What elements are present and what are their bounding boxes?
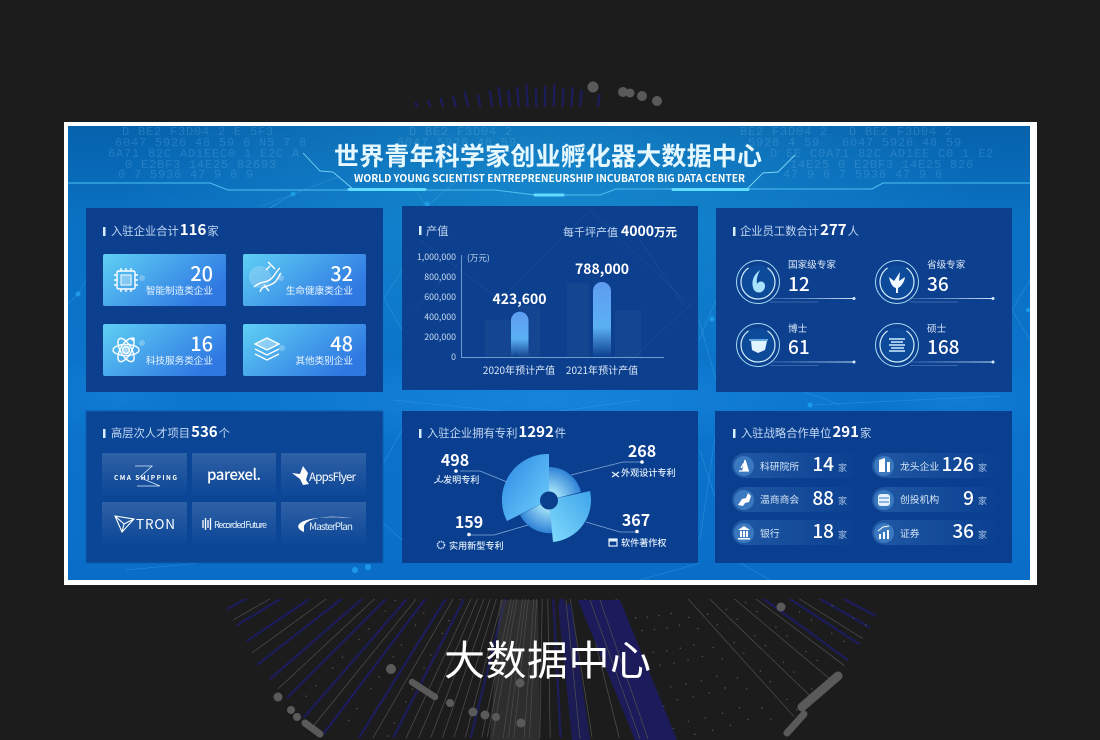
card: technology services: 科技服务类企业 <box>146 353 213 367</box>
card: life health: 32 <box>330 258 353 287</box>
bar chart: output value: 788,000 <box>575 259 629 279</box>
stat: doctorate: 61 <box>788 333 810 360</box>
heading: output value: 产值 <box>426 223 449 239</box>
callout: invention patents: 发明专利 <box>443 472 479 486</box>
card: life health <box>243 254 366 306</box>
stat: national experts: 国家级专家 <box>788 257 836 271</box>
row: research institutes: 科研院所 <box>760 459 799 473</box>
logo: CMA Shipping: CMA SHIPPING <box>114 472 177 482</box>
row: venture investment: 家 <box>978 494 987 507</box>
logo: Recorded Future: Recorded Future <box>214 518 267 531</box>
row: banks: 家 <box>838 528 847 541</box>
row: banks: 18 <box>812 517 834 544</box>
decorative data digits: 5926 4 59 <box>748 136 820 150</box>
heading: talent total: 高层次人才项目536个 <box>111 421 230 442</box>
decorative data digits: 47 9 6 7 5936 47 9 6 <box>783 168 943 182</box>
decorative data digits: D BE2 F3D04 2 E 5F3 <box>122 125 274 139</box>
stat: provincial experts: 36 <box>927 270 949 297</box>
row: Wenzhou chambers of commerce: 88 <box>812 484 834 511</box>
wedge fills <box>578 600 677 740</box>
panel: output value <box>402 206 698 390</box>
logo: AppsFlyer: AppsFlyer <box>309 469 357 485</box>
callout: design patents: 268 <box>628 438 656 462</box>
decorative data digits: 14E25 0 E2BF3 14E25 826 <box>790 158 974 172</box>
decorative data digits: D EE C0A71 82C AD1EE C0 1 E2 <box>770 147 994 161</box>
row: Wenzhou chambers of commerce: 温商商会 <box>760 492 799 506</box>
row: leading enterprises: 龙头企业 <box>900 459 939 473</box>
bar chart: output value <box>417 250 664 377</box>
stat: masters: 168 <box>927 333 960 360</box>
row: securities: 证券 <box>900 526 920 540</box>
card: technology services: 16 <box>190 328 213 357</box>
dashboard board background <box>30 126 1050 580</box>
caption: 大数据中心 <box>444 627 651 687</box>
row: leading enterprises: 126 <box>942 450 974 477</box>
callout: invention patents: 498 <box>441 447 469 471</box>
bar chart: output value: 2020年预计产值 <box>483 362 555 377</box>
row: research institutes: 家 <box>838 461 847 474</box>
row: leading enterprises <box>872 450 1002 478</box>
bar chart: output value: 2021年预计产值 <box>566 362 638 377</box>
heading: employees total: 企业员工数合计277人 <box>740 219 859 240</box>
callout: output per thousand ping: 每千坪产值4000万元 <box>563 221 678 241</box>
blobs <box>274 82 786 728</box>
callout: software copyright <box>609 507 666 549</box>
row: venture investment <box>872 484 1002 512</box>
decorative data digits: 0 7 5936 47 9 6 9 <box>118 168 254 182</box>
panel: high-level talent projects <box>86 411 383 563</box>
logo: Recorded Future <box>192 502 276 547</box>
header: circuit lines <box>68 153 1030 195</box>
stat: provincial experts: 省级专家 <box>927 257 966 271</box>
card: smart manufacturing <box>103 254 226 306</box>
rose pie chart: patents <box>460 454 642 542</box>
bar chart: output value: 400,000 <box>424 310 456 323</box>
background: radial data rays <box>227 82 876 740</box>
decorative data digits: D BE2 F3D04 2 <box>409 125 513 139</box>
stat: masters <box>876 321 994 366</box>
bar chart: output value: 600,000 <box>424 290 456 303</box>
stat: masters: 硕士 <box>927 321 947 335</box>
decorative data digits <box>108 125 994 182</box>
logo: CMA Shipping <box>102 453 187 498</box>
stat: national experts <box>736 257 856 304</box>
callout: design patents <box>612 438 676 479</box>
title: 世界青年科学家创业孵化器大数据中心 <box>334 137 762 173</box>
heading: partners total: 入驻战略合作单位291家 <box>741 421 871 442</box>
row: leading enterprises: 家 <box>978 461 987 474</box>
row: Wenzhou chambers of commerce: 家 <box>838 494 847 507</box>
logo: Tron <box>102 502 187 547</box>
decorative data digits: BE2 F3D04 2 <box>740 125 828 139</box>
row: banks: 银行 <box>760 526 780 540</box>
callout: software copyright: 367 <box>622 507 650 531</box>
logo: Parexel: parexel. <box>207 464 261 485</box>
row: Wenzhou chambers of commerce <box>732 484 862 512</box>
row: research institutes: 14 <box>812 450 834 477</box>
decorative data digits: D BE2 F3D04 2 <box>849 125 953 139</box>
card: other enterprises: 其他类别企业 <box>295 353 353 367</box>
decorative data digits: 6047 5926 48 59 <box>397 136 517 150</box>
bar chart: output value: 800,000 <box>424 270 456 283</box>
bar chart: output value: 200,000 <box>424 330 456 343</box>
decorative data digits: 6047 5926 48 59 <box>842 136 962 150</box>
decorative data digits: 6047 5926 48 59 6 N5 7 8 <box>115 136 307 150</box>
card: smart manufacturing: 智能制造类企业 <box>146 283 213 297</box>
bar chart: output value: 0 <box>451 350 456 363</box>
card: life health: 生命健康类企业 <box>286 283 353 297</box>
row: securities: 家 <box>978 528 987 541</box>
bar chart: output value: 1,000,000 <box>417 250 456 263</box>
logo: Tron: TRON <box>136 513 175 533</box>
stat: national experts: 12 <box>788 270 810 297</box>
subtitle: WORLD YOUNG SCIENTIST ENTREPRENEURSHIP INCUBATOR BIG DATA CENTER <box>354 171 745 186</box>
card: other enterprises: 48 <box>330 328 353 357</box>
row: securities: 36 <box>952 517 974 544</box>
stat: provincial experts <box>876 257 994 304</box>
bar chart: output value: 423,600 <box>492 289 547 309</box>
row: research institutes <box>732 450 862 478</box>
logo: Parexel <box>192 453 276 498</box>
callout: utility patents: 实用新型专利 <box>449 538 504 552</box>
callout: software copyright: 软件著作权 <box>621 535 666 549</box>
decorative data digits: 6A71 82C AD1EEC0 1 E2C A <box>108 147 300 161</box>
row: banks <box>732 517 862 545</box>
decorative data digits: 0 E2BF3 14E25 82693 <box>125 158 277 172</box>
callout: utility patents: 159 <box>455 509 483 533</box>
stat: doctorate: 博士 <box>788 321 808 335</box>
panel: patents <box>402 411 698 563</box>
card: smart manufacturing: 20 <box>190 258 213 287</box>
callout: design patents: 外观设计专利 <box>621 465 676 479</box>
logo: MasterPlan: MasterPlan <box>309 518 353 533</box>
panel: employees <box>716 208 1012 392</box>
white frame <box>64 122 1037 585</box>
card: other enterprises <box>243 324 366 376</box>
callout: utility patents <box>438 509 504 552</box>
logo: MasterPlan <box>281 502 366 547</box>
card: technology services <box>103 324 226 376</box>
panel: strategic partners <box>715 411 1012 563</box>
row: venture investment: 9 <box>963 484 974 511</box>
row: securities <box>872 517 1002 545</box>
heading: patents total: 入驻企业拥有专利1292件 <box>427 421 566 442</box>
panel: enterprises <box>86 208 383 392</box>
bar chart: output value: (万元) <box>467 252 490 264</box>
heading: enterprises total: 入驻企业合计116家 <box>111 219 219 240</box>
callout: invention patents <box>434 447 479 486</box>
logo: AppsFlyer <box>281 453 366 498</box>
row: venture investment: 创投机构 <box>900 492 939 506</box>
stat: doctorate <box>736 321 856 366</box>
